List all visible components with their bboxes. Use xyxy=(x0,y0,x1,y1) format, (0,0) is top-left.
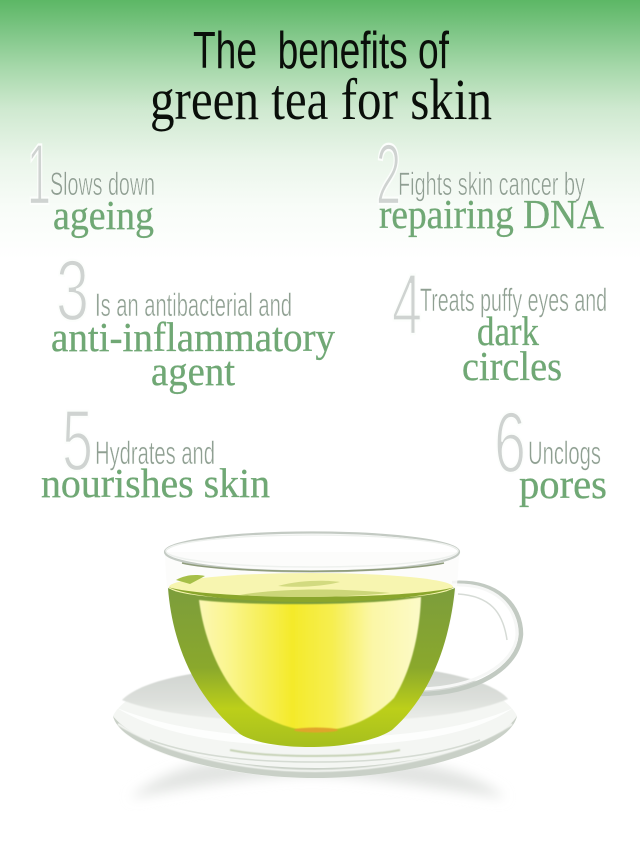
benefit 3: Is an antibacterial and xyxy=(95,287,292,323)
benefit 5: nourishes skin xyxy=(41,460,270,506)
benefit 4 xyxy=(392,257,607,389)
benefit 5: 5 xyxy=(62,393,93,489)
background gradient xyxy=(0,0,640,260)
tea base glow xyxy=(294,728,338,732)
handle xyxy=(418,583,521,694)
benefit 4: 4 xyxy=(392,257,422,353)
benefit 3: agent xyxy=(151,348,236,394)
benefit 4: circles xyxy=(462,343,562,389)
title xyxy=(150,22,492,132)
benefit 1: Slows down xyxy=(50,166,155,202)
benefit 5: Hydrates and xyxy=(95,435,215,471)
benefit 2: 2 xyxy=(376,127,401,223)
benefit 5 xyxy=(41,393,270,506)
tea surface xyxy=(169,573,453,601)
bright inner tea xyxy=(199,597,421,731)
benefit 6: pores xyxy=(519,461,607,507)
title: The benefits of xyxy=(193,22,449,80)
benefit 6: 6 xyxy=(494,395,526,491)
tea body xyxy=(168,588,455,747)
benefit 3 xyxy=(51,243,335,394)
icon: cup of green tea on a glass saucer xyxy=(113,532,521,798)
title: green tea for skin xyxy=(150,67,492,132)
benefit 4: dark xyxy=(477,308,539,354)
glass rim xyxy=(165,532,459,572)
benefit 1 xyxy=(27,127,155,238)
benefit 2 xyxy=(376,127,604,237)
benefit 1: ageing xyxy=(53,192,154,238)
benefit 3: anti-inflammatory xyxy=(51,314,335,360)
benefit 1: 1 xyxy=(27,127,51,223)
benefit 3: 3 xyxy=(56,243,89,339)
reflection xyxy=(130,760,505,798)
saucer xyxy=(113,663,517,778)
benefit 2: repairing DNA xyxy=(379,191,604,237)
glass bowl xyxy=(165,552,459,746)
benefit 6 xyxy=(494,395,607,507)
